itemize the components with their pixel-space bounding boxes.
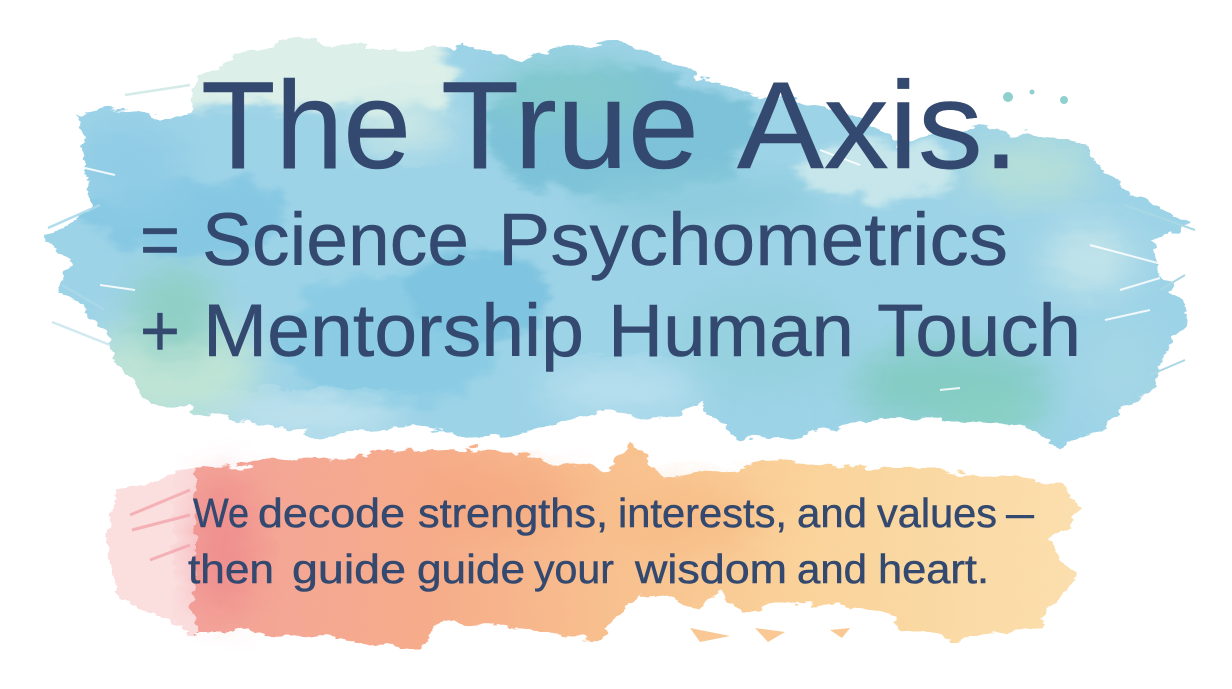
subtitle line one: interests, xyxy=(618,490,787,536)
subtitle line one: values xyxy=(877,490,997,536)
title: The xyxy=(201,57,411,195)
line: mentorship human touch: Human xyxy=(608,289,854,372)
warm watercolor wash xyxy=(105,442,1082,660)
subtitle line one: strengths, xyxy=(418,490,608,536)
orange fragments under wash xyxy=(690,628,850,642)
subtitle line two: your xyxy=(534,546,614,592)
brush streaks on right edge xyxy=(1125,205,1195,375)
line: science psychometrics: Science xyxy=(202,198,469,281)
line: mentorship human touch: + xyxy=(140,289,180,372)
subtitle line two: guide xyxy=(292,546,406,592)
title: True xyxy=(441,57,699,195)
subtitle line two: then xyxy=(188,546,274,592)
white gap in warm wash xyxy=(635,590,905,660)
line: science psychometrics xyxy=(140,198,1008,281)
line: science psychometrics: Psychometrics xyxy=(498,198,1008,281)
subtitle line one: decode xyxy=(258,490,405,536)
brush streaks on left edge xyxy=(48,85,190,345)
line: mentorship human touch: Touch xyxy=(877,289,1081,372)
line: mentorship human touch: Mentorship xyxy=(203,289,584,372)
subtitle line two: wisdom xyxy=(634,546,787,592)
line: science psychometrics: = xyxy=(140,198,180,281)
line: mentorship human touch xyxy=(140,289,1081,372)
teal splatter dots xyxy=(1003,90,1068,104)
subtitle line one: — xyxy=(1006,490,1034,536)
blue watercolor wash xyxy=(45,20,1190,450)
subtitle line two: and xyxy=(797,546,867,592)
subtitle line two xyxy=(188,546,989,592)
title xyxy=(201,57,1019,195)
subtitle line two: heart. xyxy=(878,546,989,592)
subtitle line one: We xyxy=(193,490,249,536)
title: Axis. xyxy=(737,57,1019,195)
pink brush streaks on left xyxy=(130,490,190,560)
white scratches in blue wash xyxy=(72,150,1165,390)
subtitle line one: and xyxy=(797,490,867,536)
subtitle line one xyxy=(193,490,1034,536)
subtitle line two: guide xyxy=(417,546,525,592)
